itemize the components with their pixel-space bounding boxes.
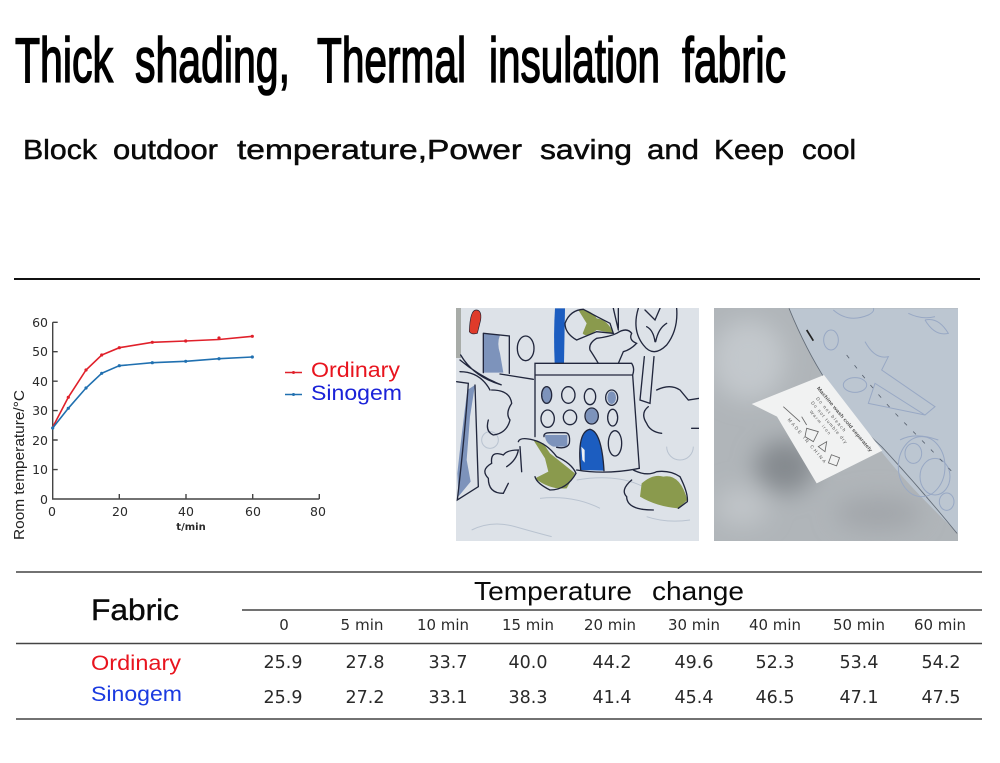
red window — [469, 310, 481, 334]
care label text: Warm iron — [809, 409, 832, 436]
time header row: 0 — [279, 616, 289, 634]
y axis tick labels: 30 — [32, 403, 48, 418]
legend — [285, 359, 402, 405]
table heading: Temperature change: Temperature — [474, 576, 632, 606]
y axis tick labels: 0 — [40, 492, 48, 507]
fabric sheen — [712, 320, 922, 530]
blue panels — [457, 334, 616, 497]
subtitle — [23, 134, 856, 165]
table — [16, 572, 982, 719]
table heading: Fabric: Fabric — [91, 594, 179, 627]
y axis tick labels — [32, 315, 48, 507]
folded patterned cloth — [789, 308, 962, 537]
line: Ordinary — [53, 335, 254, 427]
time header row: 20 min — [584, 616, 636, 634]
time header row — [279, 616, 966, 634]
title — [15, 26, 786, 96]
subtitle: Block — [23, 134, 98, 165]
row: Ordinary: 25.9 — [264, 653, 302, 673]
x axis tick labels: 0 — [48, 504, 56, 519]
x axis tick labels: 40 — [178, 504, 194, 519]
care label — [752, 375, 882, 483]
time header row: 50 min — [833, 616, 885, 634]
x axis tick labels: 60 — [245, 504, 261, 519]
y axis title: Room temperature/°C — [11, 390, 28, 540]
y axis tick labels: 50 — [32, 344, 48, 359]
row: Ordinary: 49.6 — [675, 653, 713, 673]
row: Ordinary: 44.2 — [593, 653, 631, 673]
row: Ordinary: Ordinary — [91, 651, 181, 675]
row: Sinogem: 47.5 — [922, 688, 960, 708]
ink outlines — [457, 308, 699, 510]
table heading: Temperature change: change — [652, 576, 744, 606]
row: Ordinary: 40.0 — [509, 653, 547, 673]
y axis tick labels: 60 — [32, 315, 48, 330]
subtitle: and — [647, 134, 699, 165]
title: insulation — [489, 26, 660, 96]
row: Sinogem: 27.2 — [346, 688, 384, 708]
title: Thermal — [317, 26, 466, 96]
row: Sinogem: 47.1 — [840, 688, 878, 708]
row: Sinogem: 45.4 — [675, 688, 713, 708]
row: Ordinary: 27.8 — [346, 653, 384, 673]
care label text — [788, 386, 872, 464]
subtitle: cool — [802, 134, 856, 165]
y axis tick labels: 20 — [32, 433, 48, 448]
care label text: Machine wash cold separately — [815, 386, 873, 454]
time header row: 10 min — [417, 616, 469, 634]
time header row: 40 min — [749, 616, 801, 634]
row: Sinogem: 38.3 — [509, 688, 547, 708]
title: shading, — [135, 26, 290, 96]
blue trunk and door — [554, 308, 565, 363]
time header row: 5 min — [340, 616, 384, 634]
subtitle: saving — [540, 134, 632, 165]
line chart: room temperature over time — [11, 315, 326, 540]
time header row: 30 min — [668, 616, 720, 634]
care label text: MADE IN CHINA — [787, 417, 827, 465]
line: Sinogem — [51, 355, 254, 430]
row: Ordinary: 53.4 — [840, 653, 878, 673]
time header row: 15 min — [502, 616, 554, 634]
table heading: Temperature change — [474, 576, 744, 606]
legend: Sinogem — [311, 382, 402, 405]
row: Sinogem: 41.4 — [593, 688, 631, 708]
subtitle: outdoor — [113, 134, 218, 165]
row: Sinogem: 33.1 — [429, 688, 467, 708]
time header row: 60 min — [914, 616, 966, 634]
row: Ordinary: 52.3 — [756, 653, 794, 673]
row: Ordinary — [91, 651, 960, 675]
row: Sinogem — [91, 682, 960, 708]
row: Sinogem: 25.9 — [264, 688, 302, 708]
row: Ordinary: 54.2 — [922, 653, 960, 673]
row: Sinogem: Sinogem — [91, 682, 182, 706]
subtitle: temperature,Power — [237, 134, 522, 165]
y axis tick labels: 40 — [32, 374, 48, 389]
care label text: Do not tumble dry — [810, 400, 848, 445]
photo: grey fabric with care label — [712, 308, 962, 541]
row: Ordinary: 33.7 — [429, 653, 467, 673]
title: fabric — [682, 26, 786, 96]
x axis tick labels: 80 — [310, 504, 326, 519]
subtitle: Keep — [714, 134, 784, 165]
green foliage — [533, 310, 687, 508]
photo: printed fabric with house illustration — [456, 308, 699, 541]
legend: Ordinary — [311, 359, 401, 382]
y axis tick labels: 10 — [32, 462, 48, 477]
x axis tick labels: 20 — [112, 504, 128, 519]
row: Sinogem: 46.5 — [756, 688, 794, 708]
care label text: Do not bleach — [815, 396, 847, 433]
title: Thick — [15, 26, 113, 96]
x axis title: t/min — [176, 522, 206, 533]
x axis tick labels — [48, 504, 326, 519]
